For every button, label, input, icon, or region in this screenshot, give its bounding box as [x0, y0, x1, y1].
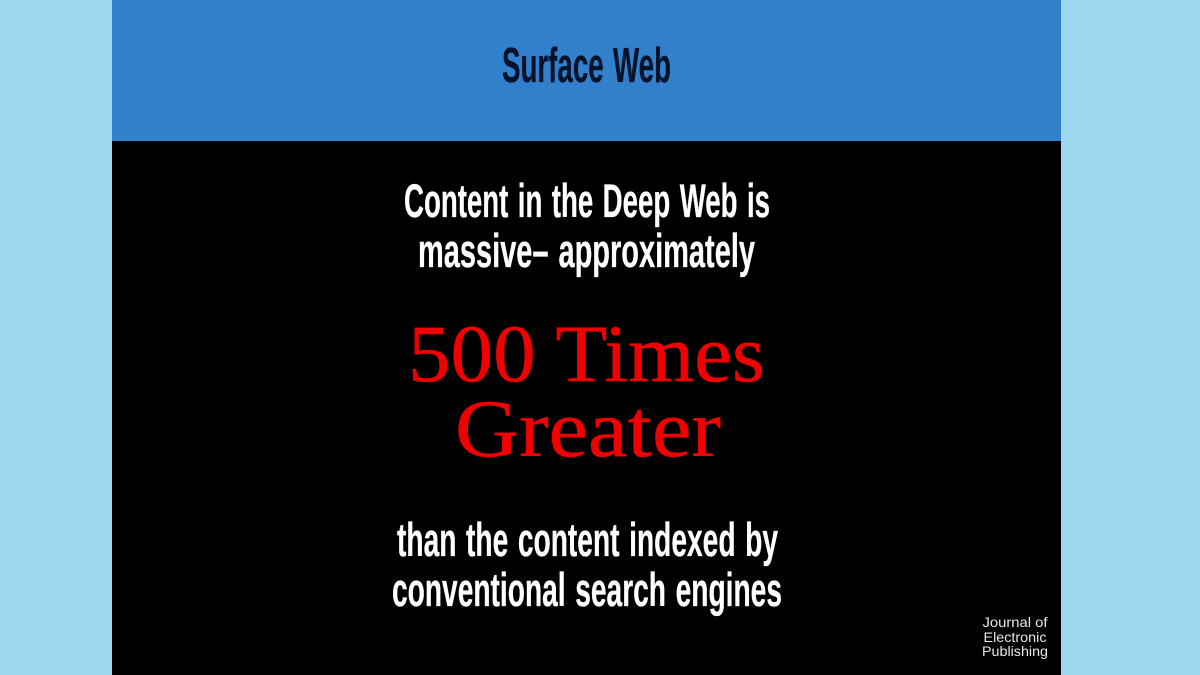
panel: header band: [112, 0, 1061, 141]
text block: conclusion: than the content indexed by: [397, 513, 778, 566]
panel: main black: [112, 141, 1061, 675]
text block: intro: Content in the Deep Web is: [404, 174, 770, 227]
source credit: [982, 614, 1048, 659]
text block: intro: massive– approximately: [418, 224, 755, 277]
text block: intro: [404, 174, 770, 277]
source credit: Publishing: [982, 643, 1048, 659]
source credit: Electronic: [984, 629, 1046, 645]
callout: 500 Times Greater: [408, 308, 765, 474]
heading: Surface Web: Surface Web: [502, 39, 671, 93]
text block: conclusion: [392, 513, 782, 616]
source credit: Journal of: [982, 614, 1048, 630]
callout: 500 Times Greater: Greater: [455, 383, 721, 474]
text block: conclusion: conventional search engines: [392, 563, 782, 616]
callout: 500 Times Greater: 500 Times: [408, 308, 765, 399]
